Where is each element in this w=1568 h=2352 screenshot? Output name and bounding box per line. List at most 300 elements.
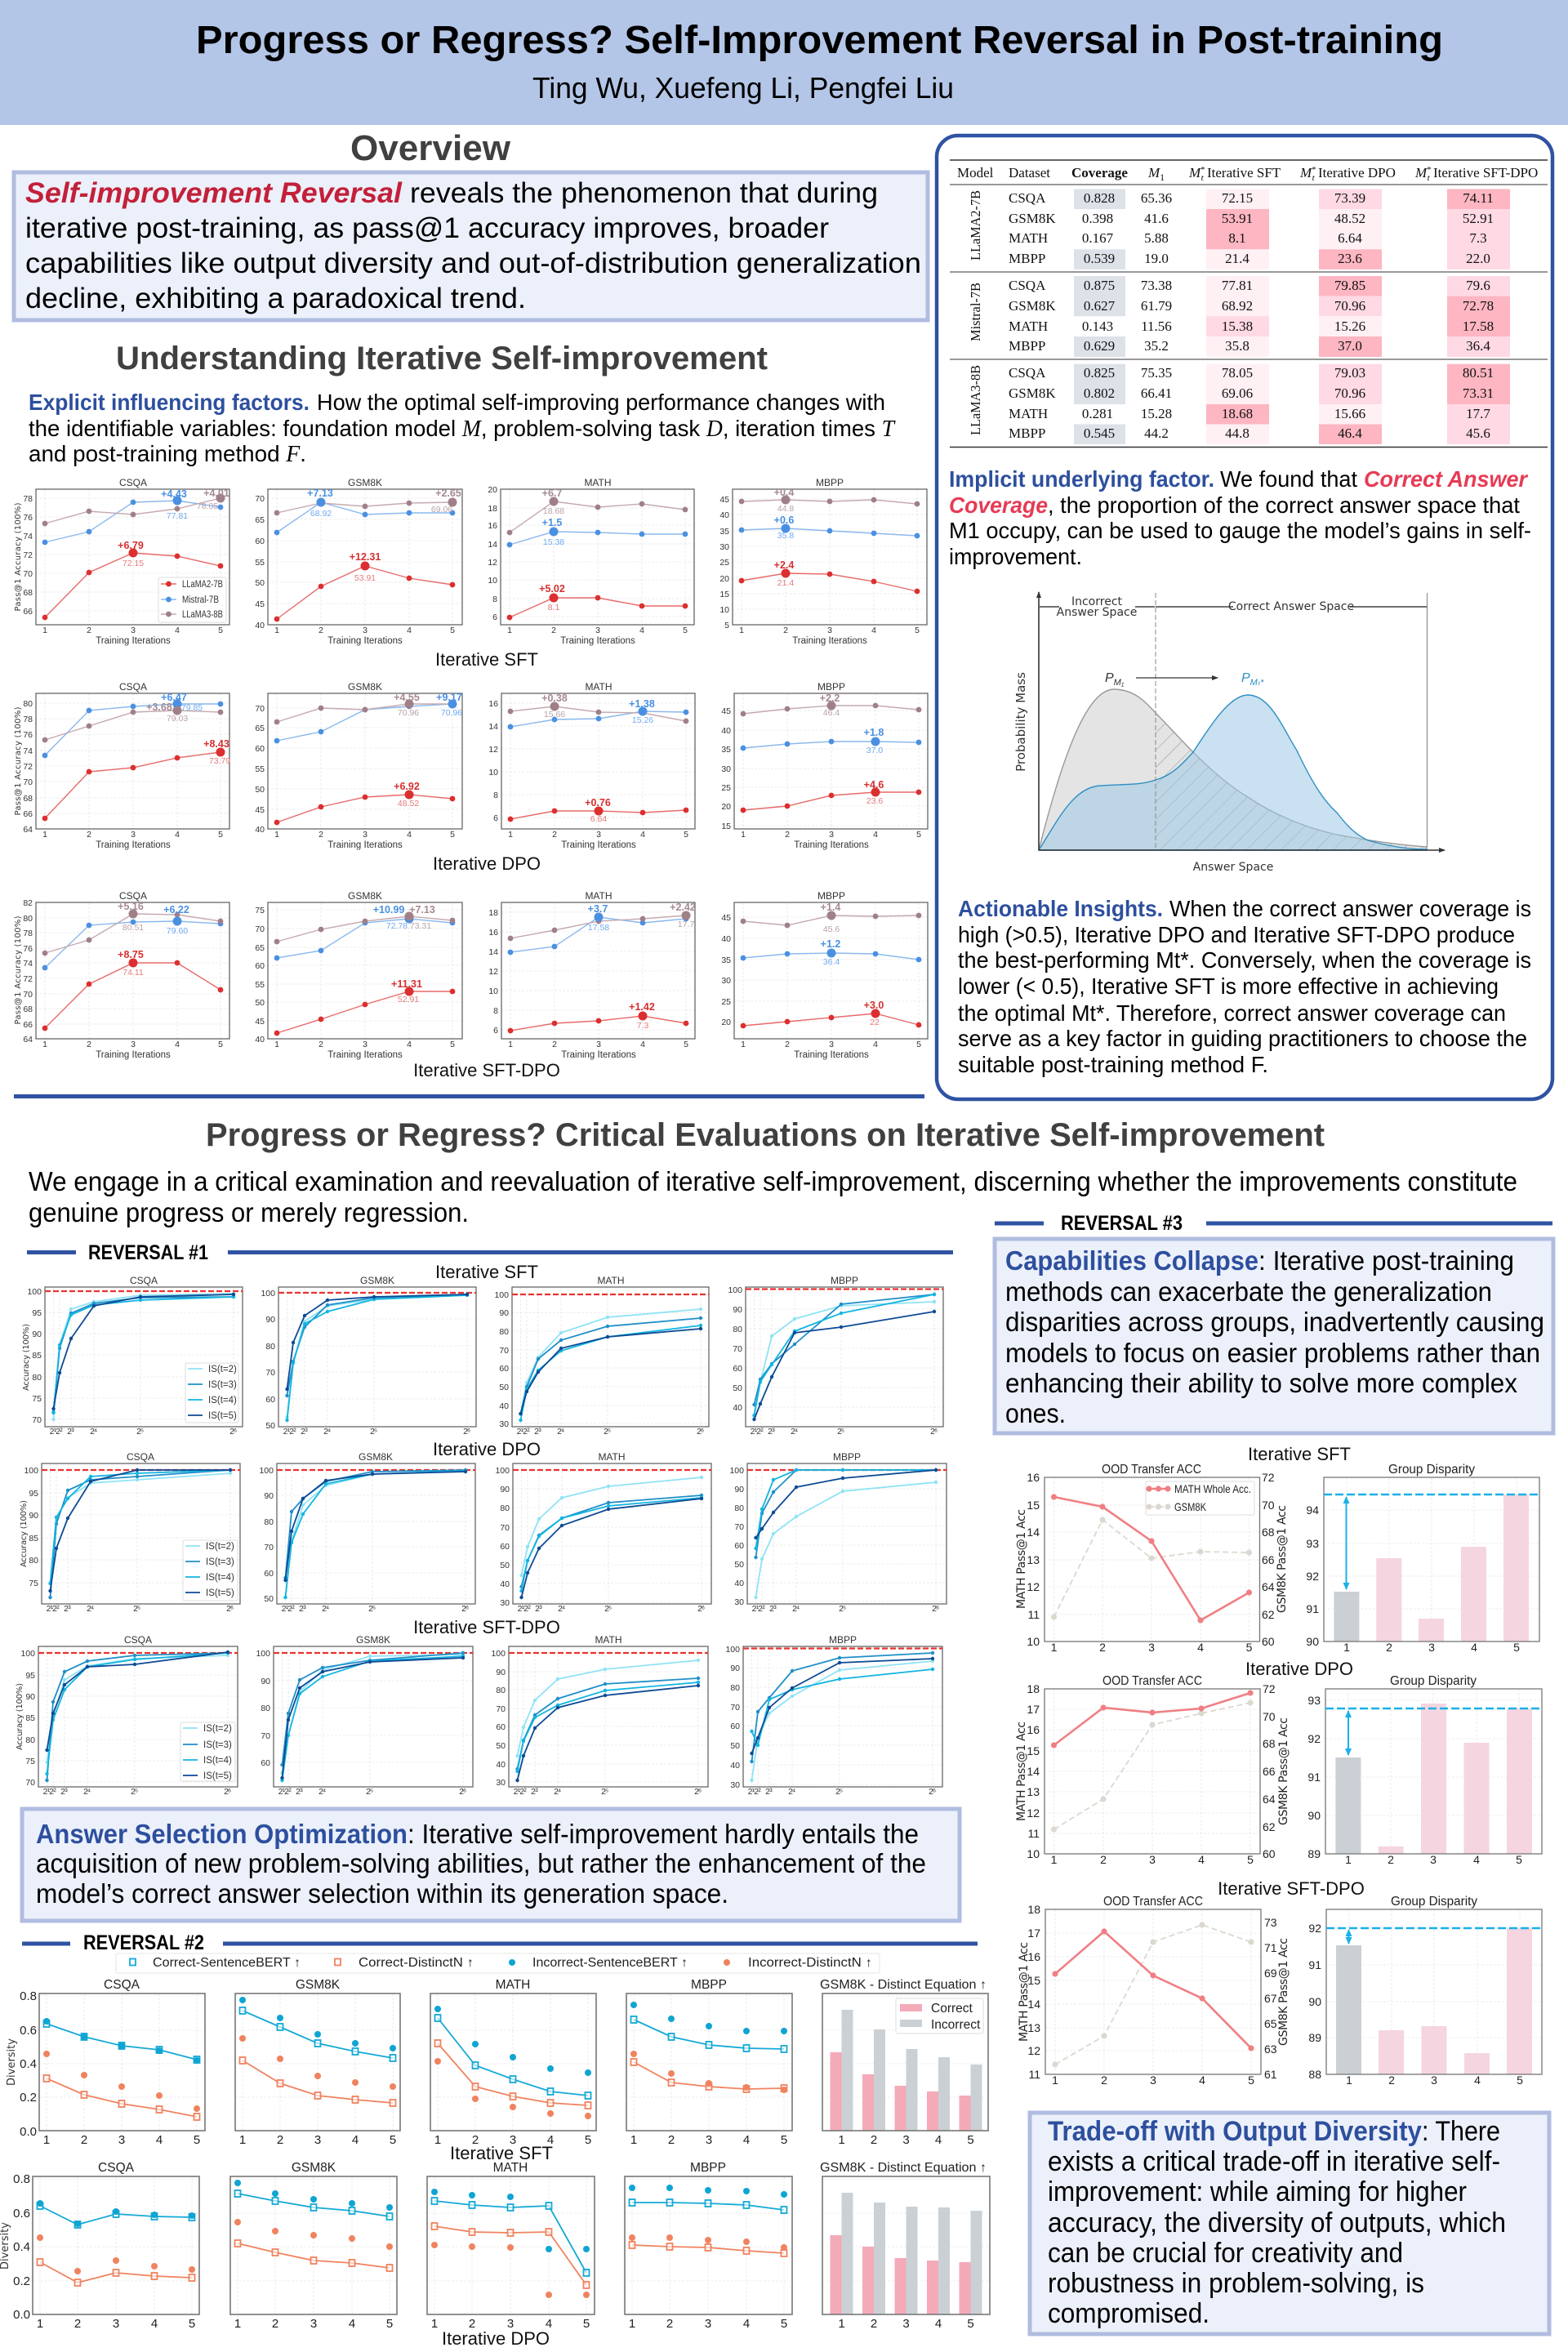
chart: R1 SFT-DPO MBPP: MBPP — [829, 1634, 857, 1646]
chart: R1 DPO MATH: 60 — [500, 1542, 510, 1552]
chart: OOD Transfer ACC SFT: MATH Pass@1 Acc — [1015, 1509, 1028, 1609]
chart: SFT-DPO MATH: 12345 — [508, 1040, 688, 1049]
chart: OOD Transfer ACC SFT-DPO: GSM8K Pass@1 Acc — [1277, 1938, 1290, 2046]
table: coverage results: 44.2 — [1144, 425, 1169, 441]
chart: SFT-DPO CSQA: Training Iterations — [96, 1050, 171, 1060]
chart: R1 SFT-DPO CSQA: 2¹2²2³2⁴2⁵2⁶ — [43, 1787, 231, 1797]
chart: Group Disparity SFT-DPO: 91 — [1308, 1958, 1321, 1971]
chart: SFT CSQA: 72 — [23, 550, 33, 560]
chart: DPO CSQA: +3.68 — [146, 702, 172, 713]
chart: SFT-DPO MBPP: 40 — [721, 934, 731, 944]
chart: SFT CSQA: 74 — [23, 532, 33, 541]
chart: SFT-DPO MBPP: 22 — [870, 1018, 880, 1027]
chart: DPO MBPP: 37.0 — [866, 746, 883, 755]
chart: R1 DPO MATH: 2¹2²2³2⁴2⁵2⁶ — [518, 1604, 705, 1614]
table: coverage results: 46.4 — [1338, 425, 1362, 441]
table: coverage results: 0.281 — [1082, 406, 1113, 421]
table: coverage results: 0.828 — [1084, 190, 1115, 206]
chart: DPO CSQA: 68 — [23, 794, 33, 804]
callout: Capabilities Collapse: ones. — [1005, 1398, 1066, 1428]
diagram: answer space probability mass: Answer Space — [1057, 606, 1137, 619]
chart: DPO MBPP: 35 — [721, 745, 731, 755]
chart: R1 SFT-DPO MBPP: 100 — [725, 1645, 740, 1655]
chart: R1 DPO MATH: 80 — [500, 1503, 510, 1513]
chart: SFT CSQA: +6.79 — [118, 540, 144, 551]
chart: SFT MATH: +5.02 — [539, 583, 565, 595]
chart: R1 SFT MBPP: 2¹2²2³2⁴2⁵2⁶ — [751, 1427, 938, 1437]
legend: IS(t=2) — [203, 1724, 232, 1734]
chart: Group Disparity DPO: 93 — [1307, 1694, 1321, 1707]
chart: OOD Transfer ACC SFT: 60 — [1262, 1635, 1275, 1648]
chart: R1 SFT-DPO GSM8K: 80 — [261, 1704, 270, 1713]
chart: OOD Transfer ACC SFT-DPO: 13 — [1027, 2021, 1040, 2034]
chart: SFT MATH: 10 — [488, 576, 497, 586]
chart: DPO GSM8K: +6.92 — [394, 781, 420, 792]
legend: Incorrect — [931, 2018, 981, 2032]
chart: OOD Transfer ACC DPO: 11 — [1027, 1827, 1040, 1840]
panel: reversal 3 Iterative SFT-DPO — [1018, 1878, 1542, 2087]
chart: R1 DPO MBPP: 100 — [729, 1466, 744, 1476]
table: coverage results: 0.398 — [1082, 211, 1113, 226]
chart: DPO MATH: +0.76 — [585, 797, 611, 808]
chart: R1 SFT CSQA: CSQA — [130, 1275, 158, 1286]
chart: OOD Transfer ACC SFT-DPO: OOD Transfer ACC — [1103, 1895, 1203, 1909]
chart: SFT MATH — [488, 477, 694, 646]
chart: OOD Transfer ACC DPO — [1015, 1674, 1290, 1866]
chart: DPO MATH: 14 — [488, 722, 498, 732]
chart: R1 SFT-DPO MBPP: 80 — [730, 1683, 740, 1693]
chart: R1 SFT CSQA: 70 — [32, 1415, 42, 1425]
chart: OOD Transfer ACC SFT-DPO: 17 — [1027, 1927, 1040, 1940]
chart: R1 SFT-DPO CSQA: 85 — [25, 1713, 35, 1723]
chart: SFT GSM8K: 68.92 — [310, 509, 332, 519]
chart: SFT-DPO GSM8K: 60 — [255, 961, 265, 971]
legend: Correct — [931, 2002, 973, 2016]
chart: SFT-DPO CSQA: 72 — [23, 974, 33, 984]
chart: SFT MBPP: Training Iterations — [792, 636, 867, 646]
chart: R1 DPO CSQA: 100 — [24, 1466, 38, 1476]
chart: SFT-DPO MBPP: 36.4 — [823, 957, 840, 967]
chart: SFT-DPO GSM8K: 40 — [255, 1035, 265, 1045]
chart: DPO GSM8K: 70 — [255, 704, 265, 714]
chart: SFT-DPO MATH: 6 — [493, 1026, 498, 1036]
chart: OOD Transfer ACC SFT-DPO: 18 — [1027, 1903, 1040, 1916]
text: implicit underlying factor: Correct Answer — [1364, 466, 1529, 492]
table: coverage results: 0.875 — [1084, 278, 1115, 293]
chart: SFT-DPO GSM8K: 65 — [255, 943, 265, 953]
chart: R2 DPO GSM8K: GSM8K — [292, 2161, 336, 2175]
chart: DPO GSM8K — [255, 681, 462, 850]
callout: Trade-off with Output Diversity: accuracy, the diversity of outputs, which — [1048, 2207, 1506, 2238]
chart: SFT GSM8K: 55 — [255, 558, 265, 568]
table: coverage results: 75.35 — [1141, 365, 1172, 381]
chart: OOD Transfer ACC DPO: 66 — [1263, 1765, 1276, 1778]
chart: Group Disparity DPO: 91 — [1307, 1771, 1321, 1784]
caption: Iterative SFT: Iterative SFT — [435, 649, 538, 670]
chart: DPO GSM8K: Training Iterations — [327, 840, 403, 850]
callout: Capabilities Collapse: : Iterative post-training — [1258, 1245, 1514, 1276]
chart: R1 SFT-DPO MATH: 70 — [496, 1704, 506, 1714]
chart: R1 DPO GSM8K: GSM8K — [359, 1451, 393, 1463]
chart: SFT-DPO MBPP: 45 — [721, 913, 731, 923]
callout: overview definition: decline, exhibiting a paradoxical trend. — [25, 283, 526, 314]
chart: OOD Transfer ACC DPO: 16 — [1027, 1723, 1040, 1736]
chart: SFT CSQA: 78.05 — [197, 501, 218, 511]
chart: SFT MATH: 18 — [488, 504, 497, 514]
chart: DPO MBPP — [721, 681, 928, 850]
chart: Group Disparity DPO: 92 — [1307, 1732, 1321, 1745]
table: coverage results: 53.91 — [1222, 211, 1253, 226]
chart: OOD Transfer ACC SFT-DPO: 67 — [1264, 1992, 1277, 2005]
caption: Iterative SFT-DPO: Iterative SFT-DPO — [413, 1617, 560, 1637]
chart: R1 SFT MBPP: 60 — [733, 1364, 742, 1374]
chart: R2 SFT MBPP: MBPP — [691, 1978, 727, 1992]
chart: R1 SFT CSQA: 90 — [32, 1330, 42, 1339]
chart: R2 SFT CSQA: 0.2 — [20, 2091, 37, 2105]
table: coverage results: 7.3 — [1469, 230, 1487, 246]
chart: OOD Transfer ACC DPO: 62 — [1263, 1820, 1276, 1833]
chart: DPO MATH: Training Iterations — [561, 840, 636, 850]
chart: R2 SFT MATH: MATH — [496, 1978, 530, 1992]
text: explicit influencing factors: the identifiable variables: foundation model M, problem-solving task D, iteration times T — [29, 416, 896, 442]
chart: SFT-DPO GSM8K: 45 — [255, 1017, 265, 1027]
chart: R2 SFT CSQA: 0.8 — [20, 1989, 37, 2003]
chart: R1 SFT-DPO MBPP — [725, 1634, 942, 1797]
table: coverage results: 0.629 — [1084, 338, 1115, 354]
chart: R1 SFT-DPO CSQA: 90 — [25, 1692, 35, 1702]
table: coverage results: 65.36 — [1141, 190, 1172, 206]
chart: R2 SFT GSM8K distinct equation bars: GSM8K - Distinct Equation ↑ — [820, 1978, 987, 1992]
chart: SFT GSM8K: 50 — [255, 578, 265, 588]
legend: IS(t=5) — [208, 1411, 237, 1421]
chart: DPO MATH: 12345 — [508, 830, 688, 840]
chart: Group Disparity DPO: 90 — [1307, 1809, 1321, 1822]
chart: SFT-DPO MATH: 17.58 — [588, 923, 609, 933]
chart: DPO CSQA: 80 — [23, 699, 33, 709]
table: coverage results: 74.11 — [1463, 190, 1494, 206]
legend — [180, 1722, 235, 1781]
chart: OOD Transfer ACC DPO: 10 — [1027, 1847, 1040, 1860]
chart: SFT-DPO MATH: 17.7 — [678, 920, 694, 929]
chart: SFT GSM8K: Training Iterations — [327, 636, 403, 646]
panel: reversal 3 Iterative SFT — [1015, 1444, 1539, 1654]
chart: OOD Transfer ACC DPO: 60 — [1263, 1847, 1276, 1860]
chart: DPO GSM8K: 65 — [255, 724, 265, 733]
table: coverage results: GSM8K — [1009, 385, 1056, 401]
legend — [896, 1998, 983, 2034]
chart: R1 SFT-DPO MBPP: 60 — [730, 1722, 740, 1731]
diagram: answer space probability mass: P — [1241, 671, 1250, 685]
chart: R1 SFT MBPP: 100 — [728, 1285, 742, 1295]
chart: R1 SFT MBPP: MBPP — [831, 1275, 858, 1286]
chart: SFT MATH: 12 — [488, 558, 497, 568]
chart: R1 DPO CSQA: CSQA — [127, 1451, 154, 1463]
chart: R1 SFT CSQA: 75 — [32, 1394, 42, 1404]
chart: R2 SFT MBPP — [626, 1978, 792, 2147]
chart: DPO GSM8K: 12345 — [274, 830, 455, 840]
table: coverage results: * — [1200, 165, 1205, 175]
chart: SFT-DPO CSQA: +8.75 — [118, 949, 144, 960]
chart: OOD Transfer ACC DPO: 64 — [1263, 1793, 1276, 1806]
chart: SFT CSQA: 77.81 — [167, 511, 188, 521]
chart: R1 SFT-DPO GSM8K — [256, 1634, 473, 1797]
chart: R1 DPO MBPP: 2¹2²2³2⁴2⁵2⁶ — [752, 1604, 939, 1614]
chart: OOD Transfer ACC SFT: OOD Transfer ACC — [1102, 1463, 1201, 1477]
chart: R1 SFT-DPO MATH: MATH — [595, 1634, 622, 1646]
chart: SFT MBPP: 45 — [719, 495, 729, 505]
chart: OOD Transfer ACC DPO: 12 — [1027, 1806, 1040, 1820]
chart: SFT GSM8K: 70 — [255, 494, 265, 504]
caption: Iterative SFT: Iterative SFT — [1248, 1444, 1351, 1464]
chart: SFT-DPO CSQA: 80.51 — [122, 923, 144, 933]
legend: IS(t=4) — [203, 1756, 232, 1766]
diagram: answer space probability mass: Correct Answer Space — [1228, 600, 1354, 613]
text: actionable insights — [958, 896, 1531, 1077]
table: coverage results: * — [1312, 165, 1316, 175]
chart: R1 SFT MATH: 40 — [499, 1401, 509, 1411]
table: coverage results: 0.539 — [1084, 251, 1115, 266]
chart: DPO GSM8K: GSM8K — [348, 681, 382, 693]
chart: R1 SFT-DPO MATH: 50 — [496, 1741, 506, 1751]
chart: SFT-DPO CSQA: 80 — [23, 914, 33, 924]
chart: SFT MBPP: 15 — [719, 590, 729, 599]
chart: R2 DPO CSQA: 0.4 — [13, 2240, 30, 2254]
table: coverage results: 52.91 — [1463, 211, 1494, 226]
chart: DPO MBPP: +4.6 — [864, 779, 884, 791]
chart: OOD Transfer ACC SFT-DPO: 61 — [1264, 2068, 1277, 2081]
chart: OOD Transfer ACC SFT-DPO: 11 — [1028, 2068, 1040, 2081]
chart: SFT MATH: 12345 — [507, 626, 688, 635]
table: coverage results: 15.28 — [1141, 406, 1172, 421]
callout: Trade-off with Output Diversity: Trade-off with Output Diversity — [1048, 2116, 1422, 2147]
chart: DPO CSQA: 76 — [23, 730, 33, 740]
text: actionable insights: When the correct answer coverage is — [1169, 896, 1531, 921]
heading: Reversal #2 — [22, 1931, 978, 1954]
chart: SFT-DPO MBPP: +1.2 — [821, 938, 840, 950]
chart: R1 DPO MATH: 50 — [500, 1561, 510, 1570]
chart: R2 DPO GSM8K distinct equation bars — [820, 2161, 990, 2331]
chart: SFT MBPP: 25 — [719, 558, 729, 568]
chart: DPO CSQA: CSQA — [119, 681, 147, 693]
chart: R1 SFT CSQA: 80 — [32, 1373, 42, 1383]
diagram: answer space probability mass: Incorrect — [1071, 595, 1123, 608]
chart: R2 SFT CSQA: 0.4 — [20, 2057, 37, 2071]
chart: R1 SFT CSQA — [22, 1275, 243, 1437]
chart: OOD Transfer ACC SFT: 13 — [1027, 1553, 1040, 1566]
chart: R1 DPO MBPP: 90 — [734, 1485, 744, 1494]
chart: R1 SFT MATH — [494, 1275, 709, 1437]
chart: R1 DPO GSM8K: 50 — [264, 1594, 274, 1604]
chart: Group Disparity DPO: 12345 — [1345, 1853, 1522, 1866]
caption: Iterative DPO: Iterative DPO — [433, 1439, 541, 1459]
chart: R2 DPO GSM8K distinct equation bars: 12345 — [838, 2317, 974, 2331]
chart: SFT-DPO GSM8K: Training Iterations — [327, 1050, 403, 1060]
table: coverage results: Iterative SFT — [1204, 165, 1281, 180]
table: coverage results: MBPP — [1009, 425, 1045, 441]
chart: SFT-DPO MATH: 18 — [488, 908, 498, 918]
callout: overview definition: capabilities like output diversity and out-of-distribution generalization — [25, 247, 921, 279]
legend — [183, 1540, 238, 1601]
chart: Group Disparity SFT — [1306, 1463, 1539, 1654]
chart: R1 SFT-DPO GSM8K: 60 — [261, 1758, 270, 1768]
table: coverage results: Dataset — [1009, 165, 1050, 180]
chart: SFT CSQA: 72.15 — [122, 559, 144, 568]
legend — [185, 1363, 238, 1423]
table: coverage results: 70.96 — [1334, 385, 1365, 401]
chart: Group Disparity SFT: 90 — [1306, 1635, 1319, 1648]
table: coverage results: 73.38 — [1141, 278, 1172, 293]
legend: IS(t=3) — [206, 1557, 234, 1567]
table: coverage results: 15.26 — [1334, 318, 1365, 334]
chart: SFT GSM8K: +7.13 — [307, 488, 333, 499]
caption: Iterative SFT: Iterative SFT — [435, 1262, 538, 1282]
heading: Reversal #3: REVERSAL #3 — [1061, 1212, 1183, 1235]
chart: SFT-DPO GSM8K: 50 — [255, 998, 265, 1008]
table: coverage results: 44.8 — [1225, 425, 1250, 441]
table: coverage results: Model — [957, 165, 994, 180]
chart: OOD Transfer ACC SFT: 16 — [1027, 1471, 1040, 1484]
chart: R1 DPO MATH: 90 — [500, 1485, 510, 1494]
chart: OOD Transfer ACC SFT: 70 — [1262, 1499, 1275, 1512]
chart: OOD Transfer ACC SFT-DPO: 16 — [1027, 1950, 1040, 1963]
chart: R2 DPO GSM8K: 12345 — [234, 2317, 393, 2331]
chart: R2 DPO GSM8K — [230, 2161, 397, 2331]
heading: Progress or Regress critical evaluations: Progress or Regress? Critical Evaluations on Iterative Self-improvement — [206, 1117, 1325, 1153]
legend: IS(t=4) — [208, 1396, 237, 1405]
chart: R1 DPO MBPP: 80 — [734, 1503, 744, 1513]
chart: DPO GSM8K: 60 — [255, 744, 265, 754]
legend: LLaMA2-7B — [182, 580, 223, 590]
chart: R1 DPO CSQA: 95 — [29, 1489, 38, 1499]
chart: R1 SFT-DPO MBPP: 2¹2²2³2⁴2⁵2⁶ — [748, 1787, 936, 1797]
table: coverage results: 68.92 — [1222, 298, 1253, 314]
chart: R1 SFT MATH: 80 — [499, 1327, 509, 1337]
chart: SFT GSM8K — [255, 477, 462, 646]
table: coverage results: * — [1427, 165, 1432, 175]
chart: DPO CSQA: 64 — [23, 825, 33, 835]
chart: SFT MBPP: 12345 — [739, 626, 920, 635]
chart: R2 SFT CSQA: 12345 — [43, 2133, 200, 2147]
legend: IS(t=5) — [206, 1588, 234, 1598]
chart: DPO MATH: 15.26 — [632, 715, 653, 725]
chart: R1 SFT-DPO CSQA: 100 — [20, 1649, 35, 1659]
chart: R2 SFT CSQA: 0.0 — [20, 2125, 37, 2139]
caption: Iterative SFT-DPO: Iterative SFT-DPO — [1218, 1878, 1365, 1899]
chart: R1 SFT-DPO GSM8K: 2¹2²2³2⁴2⁵2⁶ — [278, 1787, 466, 1797]
table: coverage results: 6.64 — [1338, 230, 1362, 246]
chart: DPO MBPP: 30 — [721, 764, 731, 774]
heading: Reversal #1 — [27, 1241, 953, 1264]
chart: R1 SFT MATH: MATH — [597, 1275, 625, 1286]
chart: SFT-DPO GSM8K: 52.91 — [398, 995, 419, 1004]
legend — [158, 577, 226, 622]
chart: R1 SFT GSM8K — [261, 1275, 476, 1437]
chart: DPO CSQA: 78 — [23, 715, 33, 724]
callout: overview definition: reveals the phenomenon that during — [410, 177, 878, 209]
chart: R1 SFT CSQA: 2¹2²2³2⁴2⁵2⁶ — [50, 1427, 237, 1437]
table: coverage results: MATH — [1009, 406, 1048, 421]
chart: DPO MATH: 15.66 — [544, 710, 565, 719]
chart: R1 DPO CSQA: 90 — [29, 1511, 38, 1521]
chart: SFT MATH: 14 — [488, 540, 497, 550]
legend: Mistral-7B — [182, 595, 219, 605]
authors: Ting Wu, Xuefeng Li, Pengfei Liu — [532, 71, 954, 105]
chart: SFT MBPP: 40 — [719, 510, 729, 520]
callout: Answer Selection Optimization — [22, 1809, 960, 1921]
chart: OOD Transfer ACC DPO: OOD Transfer ACC — [1102, 1674, 1202, 1688]
chart: R1 DPO MATH: 40 — [500, 1579, 510, 1589]
table: coverage results: Coverage — [1071, 165, 1128, 180]
chart: R1 SFT-DPO GSM8K: 100 — [256, 1649, 270, 1659]
chart: DPO GSM8K: 48.52 — [398, 799, 419, 808]
legend: IS(t=3) — [208, 1380, 237, 1390]
chart: SFT CSQA: +4.43 — [161, 488, 187, 500]
chart: DPO MBPP: 25 — [721, 783, 731, 793]
text: implicit underlying factor: improvement. — [949, 544, 1082, 569]
chart: R1 DPO MATH: 100 — [495, 1466, 510, 1476]
chart: R1 SFT-DPO CSQA: Accuracy (100%) — [16, 1683, 24, 1750]
chart: OOD Transfer ACC DPO: 13 — [1027, 1785, 1040, 1798]
panel: Iterative DPO line charts — [14, 681, 928, 874]
chart: R1 SFT-DPO MATH: 80 — [496, 1686, 506, 1695]
chart: OOD Transfer ACC SFT: 66 — [1262, 1553, 1275, 1566]
chart: R1 SFT MBPP: 80 — [733, 1325, 742, 1334]
chart: SFT-DPO CSQA: 79.60 — [167, 926, 188, 936]
chart: SFT-DPO MATH: 16 — [488, 928, 498, 938]
callout: Trade-off with Output Diversity — [1030, 2113, 1549, 2334]
chart: R2 DPO MBPP — [625, 2161, 792, 2331]
chart: SFT GSM8K: 12345 — [274, 626, 455, 635]
chart: R1 DPO CSQA: Accuracy (100%) — [20, 1500, 29, 1567]
chart: R1 SFT CSQA: Accuracy (100%) — [22, 1324, 31, 1391]
chart: SFT MATH: 20 — [488, 485, 497, 495]
table: coverage results: 5.88 — [1144, 230, 1169, 246]
chart: OOD Transfer ACC DPO: 14 — [1027, 1765, 1040, 1778]
callout: Trade-off with Output Diversity: robustness in problem-solving, is — [1048, 2268, 1424, 2299]
caption: Iterative DPO: Iterative DPO — [1245, 1659, 1353, 1679]
table: coverage results: 15.38 — [1222, 318, 1253, 334]
chart: DPO CSQA: +8.43 — [203, 738, 229, 750]
diagram: answer space probability mass — [1013, 592, 1445, 874]
text: introduction: We engage in a critical examination and reevaluation of iterative self-improvement, discerning whether the improvements constitute — [29, 1166, 1517, 1196]
table: coverage results: 66.41 — [1141, 385, 1172, 401]
chart: DPO CSQA: 79.85 — [181, 703, 203, 713]
chart: R1 SFT-DPO GSM8K: 90 — [261, 1677, 270, 1686]
chart: Group Disparity SFT: Group Disparity — [1388, 1463, 1475, 1477]
chart: SFT CSQA: 70 — [23, 569, 33, 579]
chart: SFT-DPO MATH: 10 — [488, 987, 498, 996]
callout: Answer Selection Optimization: : Iterative self-improvement hardly entails the — [408, 1819, 919, 1849]
table: coverage results: 73.31 — [1463, 385, 1494, 401]
table: coverage results: CSQA — [1009, 190, 1046, 206]
chart: SFT MATH: 15.38 — [543, 537, 564, 547]
chart: Group Disparity SFT-DPO — [1308, 1895, 1542, 2087]
panel: reversal 1 Iterative DPO charts — [20, 1439, 947, 1614]
chart: DPO GSM8K: +4.55 — [394, 692, 420, 703]
panel: reversal 2 Iterative SFT charts — [6, 1978, 988, 2163]
chart: R1 SFT-DPO MATH: 100 — [491, 1649, 506, 1659]
chart: SFT MBPP: 30 — [719, 542, 729, 552]
chart: R1 SFT-DPO MATH: 40 — [496, 1760, 506, 1770]
chart: Group Disparity SFT: 12345 — [1343, 1641, 1520, 1654]
table: coverage results: 0.802 — [1084, 385, 1115, 401]
chart: R1 SFT-DPO MATH: 30 — [496, 1778, 506, 1788]
text: actionable insights: lower (< 0.5), Iterative SFT is more effective in achieving — [958, 973, 1499, 999]
chart: SFT-DPO GSM8K: GSM8K — [348, 890, 382, 902]
chart: R1 DPO MATH: 70 — [500, 1523, 510, 1533]
table: coverage results: 0.825 — [1084, 365, 1115, 381]
chart: DPO MBPP: +1.8 — [864, 727, 884, 738]
